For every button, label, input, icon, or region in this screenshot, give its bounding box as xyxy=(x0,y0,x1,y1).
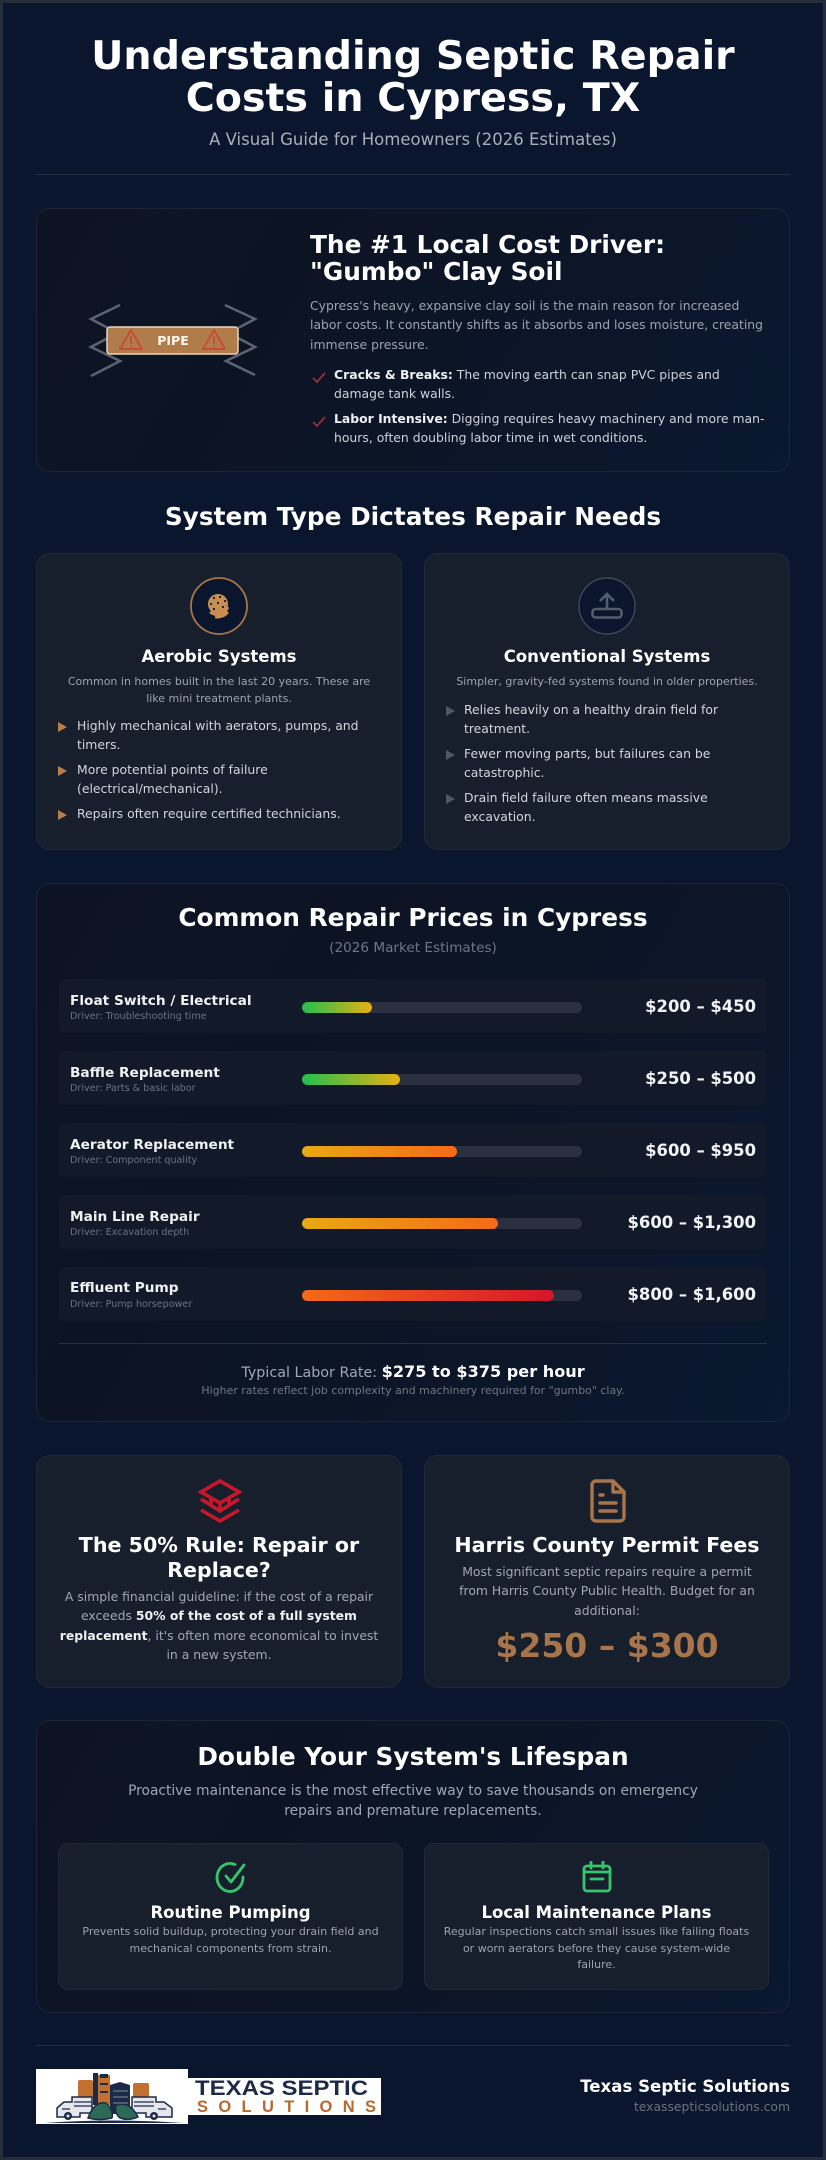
bar: main line xyxy=(302,1218,582,1229)
right truck xyxy=(132,2097,172,2117)
list item: Relies heavily on a healthy drain field for xyxy=(464,702,718,717)
icon: layered box xyxy=(198,1479,242,1524)
list item: excavation. xyxy=(464,809,536,824)
list item xyxy=(446,746,710,780)
card text: in a new system. xyxy=(166,1647,272,1662)
card text xyxy=(82,1925,379,1954)
row: effluent pump: $800 – $1,600 xyxy=(628,1285,756,1304)
description: Cypress's heavy, expansive clay soil is the main reason for increased xyxy=(310,298,739,313)
subheading: (2026 Market Estimates) xyxy=(329,940,497,956)
logo: SOLUTIONS xyxy=(197,2098,376,2116)
card text: additional: xyxy=(574,1603,640,1618)
panel: permit fees xyxy=(424,1455,790,1688)
row: main line: $600 – $1,300 xyxy=(628,1213,756,1232)
heading: lifespan: Double Your System's Lifespan xyxy=(197,1742,629,1771)
card title: The 50% Rule: Repair or xyxy=(79,1533,359,1557)
card text: failure. xyxy=(577,1958,616,1971)
icon: conventional xyxy=(578,577,636,635)
panel: routine pumping xyxy=(58,1843,403,1990)
panel: repair prices xyxy=(36,883,790,1422)
icon: aerobic xyxy=(190,577,248,635)
bar: float switch xyxy=(302,1002,582,1013)
card title xyxy=(78,1533,360,1582)
bullet: labor intensive xyxy=(334,411,764,445)
list item xyxy=(446,702,718,736)
card text: replacement, it's often more economical to invest xyxy=(60,1628,378,1643)
heading: The #1 Local Cost Driver: xyxy=(310,230,665,259)
heading: system type: System Type Dictates Repair Needs xyxy=(165,502,661,531)
permit price: $250 – $300 xyxy=(495,1626,719,1665)
description: labor costs. It constantly shifts as it absorbs and loses moisture, creating xyxy=(310,317,763,332)
row: baffle: $250 – $500 xyxy=(645,1069,756,1088)
row: main line: Driver: Excavation depth xyxy=(70,1227,189,1238)
icon: check xyxy=(312,416,326,428)
maintenance intro: Proactive maintenance is the most effective way to save thousands on emergency xyxy=(128,1783,698,1799)
bullet: cracks and breaks: damage tank walls. xyxy=(334,386,455,401)
list item: timers. xyxy=(77,737,120,752)
card text xyxy=(60,1589,378,1662)
card title: Harris County Permit Fees xyxy=(454,1533,760,1557)
panel: conventional systems xyxy=(424,553,790,850)
list item xyxy=(58,718,359,752)
list item xyxy=(446,790,708,824)
icon: check circle xyxy=(216,1862,246,1893)
list item: Repairs often require certified technicians. xyxy=(77,806,341,821)
row: baffle: Driver: Parts & basic labor xyxy=(70,1083,196,1094)
row: baffle xyxy=(59,1051,767,1105)
illustration: stressed pipe: PIPE xyxy=(157,333,189,348)
maintenance intro xyxy=(128,1783,698,1818)
description xyxy=(310,298,763,352)
heading: "Gumbo" Clay Soil xyxy=(310,257,562,286)
icon: document xyxy=(590,1479,626,1523)
bullet: cracks and breaks xyxy=(334,367,720,401)
card text: exceeds 50% of the cost of a full system xyxy=(81,1608,357,1623)
card text: or worn aerators before they cause system-wide xyxy=(463,1942,730,1954)
title: Costs in Cypress, TX xyxy=(186,75,640,121)
card text xyxy=(459,1564,755,1618)
card title: Replace? xyxy=(167,1558,271,1582)
subtitle: A Visual Guide for Homeowners (2026 Estimates) xyxy=(209,130,617,149)
illustration: stressed pipe xyxy=(88,304,258,377)
bullet: cracks and breaks: Cracks & Breaks: The moving earth can snap PVC pipes and xyxy=(334,367,720,382)
left truck xyxy=(57,2097,92,2117)
panel: 50 percent rule xyxy=(36,1455,402,1688)
row: baffle: Baffle Replacement xyxy=(70,1065,220,1081)
card description: Common in homes built in the last 20 years. These are xyxy=(68,675,370,688)
card text: from Harris County Public Health. Budget for an xyxy=(459,1583,755,1598)
bar: baffle xyxy=(302,1074,582,1085)
footer url: texassepticsolutions.com xyxy=(634,2100,790,2114)
icon: calendar xyxy=(582,1861,612,1892)
list item: Drain field failure often means massive xyxy=(464,790,708,805)
panel: gumbo clay soil xyxy=(36,208,790,472)
icon: check xyxy=(312,372,326,384)
panel: local maintenance xyxy=(424,1843,769,1990)
card text: mechanical components from strain. xyxy=(130,1942,332,1954)
list item: (electrical/mechanical). xyxy=(77,781,223,796)
card description: Simpler, gravity-fed systems found in older properties. xyxy=(456,675,758,688)
logo xyxy=(36,2069,381,2124)
panel: aerobic systems xyxy=(36,553,402,850)
maintenance intro: repairs and premature replacements. xyxy=(284,1802,542,1818)
row: float switch: Float Switch / Electrical xyxy=(70,993,252,1009)
green leaves xyxy=(88,2103,112,2120)
list item: Fewer moving parts, but failures can be xyxy=(464,746,710,761)
title xyxy=(91,33,735,121)
card text: A simple financial guideline: if the cost of a repair xyxy=(65,1589,373,1604)
labor rate: Typical Labor Rate: $275 to $375 per hour xyxy=(241,1362,585,1381)
panel: maintenance xyxy=(36,1720,790,2013)
card title: Local Maintenance Plans xyxy=(482,1903,712,1922)
bar: effluent pump xyxy=(302,1290,582,1301)
list item: More potential points of failure xyxy=(77,762,268,777)
row: aerator: Aerator Replacement xyxy=(70,1137,234,1153)
list item xyxy=(58,762,268,796)
card text: Prevents solid buildup, protecting your drain field and xyxy=(82,1925,379,1938)
card description: like mini treatment plants. xyxy=(146,692,292,705)
card title: Aerobic Systems xyxy=(142,647,296,666)
logo art xyxy=(45,2073,183,2123)
row: aerator: $600 – $950 xyxy=(645,1141,756,1160)
row: effluent pump xyxy=(59,1267,767,1321)
card description xyxy=(68,675,370,705)
bullet: labor intensive: hours, often doubling labor time in wet conditions. xyxy=(334,430,647,445)
row: main line: Main Line Repair xyxy=(70,1209,200,1225)
footer company name: Texas Septic Solutions xyxy=(580,2077,790,2096)
card text: Regular inspections catch small issues like failing floats xyxy=(444,1925,749,1938)
title: Understanding Septic Repair xyxy=(91,33,735,79)
bar: aerator xyxy=(302,1146,582,1157)
list item: catastrophic. xyxy=(464,765,544,780)
row: aerator: Driver: Component quality xyxy=(70,1155,197,1166)
description: immense pressure. xyxy=(310,337,429,352)
bullet: labor intensive: Labor Intensive: Digging requires heavy machinery and more man- xyxy=(334,411,764,426)
row: aerator xyxy=(59,1123,767,1177)
row: float switch: $200 – $450 xyxy=(645,997,756,1016)
row: main line xyxy=(59,1195,767,1249)
list item: treatment. xyxy=(464,721,530,736)
row: float switch xyxy=(59,979,767,1033)
card title: Conventional Systems xyxy=(504,647,710,666)
card title: Routine Pumping xyxy=(150,1903,311,1922)
row: effluent pump: Driver: Pump horsepower xyxy=(70,1299,192,1310)
labor note: Higher rates reflect job complexity and machinery required for "gumbo" clay. xyxy=(201,1384,625,1397)
heading xyxy=(310,230,665,286)
list item: Highly mechanical with aerators, pumps, and xyxy=(77,718,359,733)
row: effluent pump: Effluent Pump xyxy=(70,1280,179,1296)
card text xyxy=(444,1925,749,1971)
row: float switch: Driver: Troubleshooting time xyxy=(70,1011,207,1022)
card text: Most significant septic repairs require a permit xyxy=(462,1564,752,1579)
logo: TEXAS SEPTIC xyxy=(195,2077,368,2100)
heading: prices: Common Repair Prices in Cypress xyxy=(178,903,648,932)
